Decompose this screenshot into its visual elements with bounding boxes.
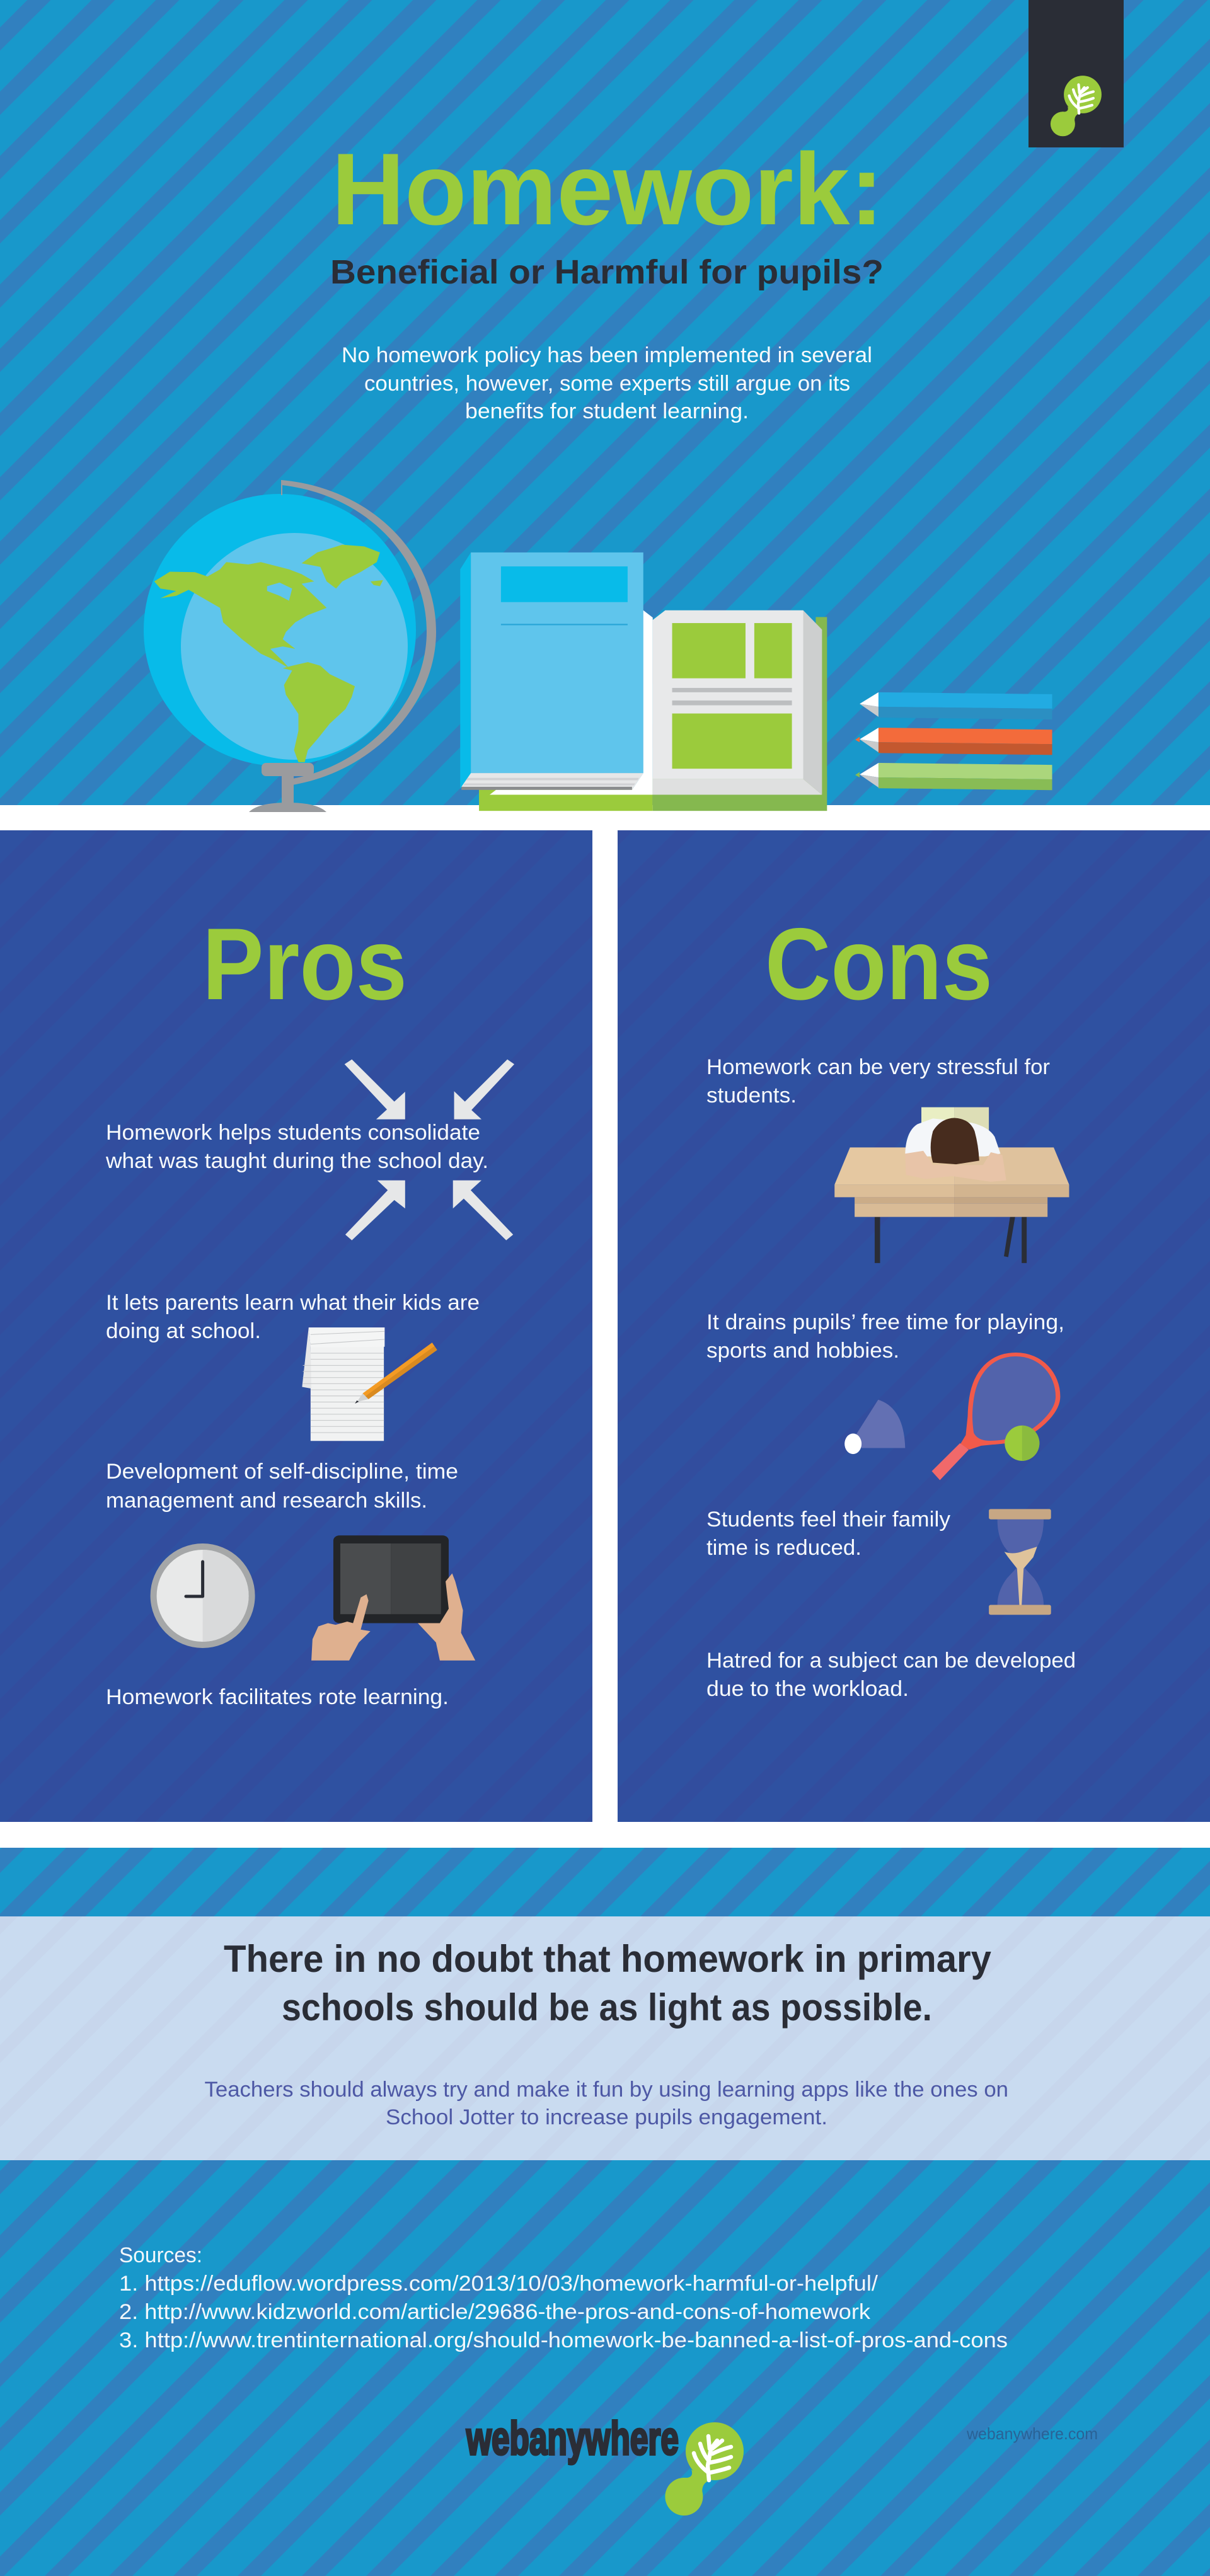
website url: webanywhere.com (966, 2424, 1098, 2443)
cons heading: Cons (765, 907, 993, 1021)
text: stressful: students. (706, 1084, 797, 1108)
panel: conclusion band (0, 1916, 1210, 2160)
text: rote learning: Homework facilitates rote learning. (106, 1685, 449, 1709)
header section background (0, 0, 1210, 805)
conclusion heading: schools should be as light as possible. (282, 1986, 932, 2029)
text: self-discipline: management and research skills. (106, 1489, 427, 1513)
sources: 2. http://www.kidzworld.com/article/29686-the-pros-and-cons-of-homework (119, 2300, 871, 2324)
intro text: No homework policy has been implemented in several (342, 343, 872, 367)
text: hatred: Hatred for a subject can be developed (706, 1649, 1076, 1673)
icon: hourglass (989, 1509, 1051, 1615)
text: parents: It lets parents learn what their kids are (106, 1291, 480, 1315)
text: free time (706, 1310, 1064, 1363)
icon: shuttlecock (844, 1400, 905, 1454)
conclusion text: School Jotter to increase pupils engagement. (386, 2105, 827, 2129)
icon: notepad and pencil (302, 1327, 437, 1441)
text: hatred (706, 1649, 1076, 1701)
text: consolidate: what was taught during the school day. (105, 1149, 488, 1173)
text: parents: doing at school. (106, 1319, 261, 1343)
text: stressful: Homework can be very stressful for (706, 1055, 1050, 1079)
footer logo (466, 2412, 744, 2516)
sources (119, 2243, 1008, 2352)
intro text: benefits for student learning. (465, 399, 749, 423)
intro text: countries, however, some experts still argue on its (364, 372, 850, 396)
illustration: pencils (855, 692, 1052, 790)
text: hatred: due to the workload. (706, 1677, 909, 1701)
text: stressful (706, 1055, 1050, 1108)
text: consolidate: Homework helps students consolidate (106, 1121, 480, 1145)
conclusion text: Teachers should always try and make it fun by using learning apps like the ones on (204, 2078, 1008, 2102)
icon: converging arrows (345, 1060, 514, 1240)
footer section background (0, 1848, 1210, 2576)
text: family time: time is reduced. (706, 1536, 861, 1560)
sources: 3. http://www.trentinternational.org/should-homework-be-banned-a-list-of-pros-and-cons (119, 2328, 1008, 2352)
pros heading: Pros (202, 907, 407, 1021)
icon: clock (151, 1543, 255, 1648)
icon: tennis racket and ball (932, 1354, 1058, 1480)
intro text (342, 343, 872, 423)
title: Homework: (331, 132, 884, 246)
illustration: globe (144, 480, 436, 812)
subtitle: Beneficial or Harmful for pupils? (330, 253, 884, 291)
text: consolidate (105, 1121, 488, 1173)
illustration: open book (460, 552, 827, 811)
icon: tablet with hands (311, 1535, 475, 1661)
sources: Sources: (119, 2243, 202, 2267)
logo tab (1028, 0, 1124, 147)
conclusion heading: There in no doubt that homework in primary (224, 1938, 992, 1980)
text: free time: sports and hobbies. (706, 1339, 899, 1363)
text: family time (706, 1508, 950, 1560)
text: parents (106, 1291, 480, 1343)
text: self-discipline: Development of self-discipline, time (106, 1460, 458, 1484)
text: family time: Students feel their family (706, 1508, 950, 1531)
conclusion heading (224, 1938, 992, 2029)
text: self-discipline (106, 1460, 458, 1513)
panel: pros (0, 830, 592, 1822)
icon: student asleep at desk (834, 1108, 1069, 1263)
footer logo: webanywhere (466, 2412, 679, 2464)
panel: cons (618, 830, 1210, 1822)
conclusion text (204, 2078, 1008, 2129)
text: free time: It drains pupils’ free time for playing, (706, 1310, 1064, 1334)
sources: 1. https://eduflow.wordpress.com/2013/10/03/homework-harmful-or-helpful/ (119, 2272, 879, 2296)
